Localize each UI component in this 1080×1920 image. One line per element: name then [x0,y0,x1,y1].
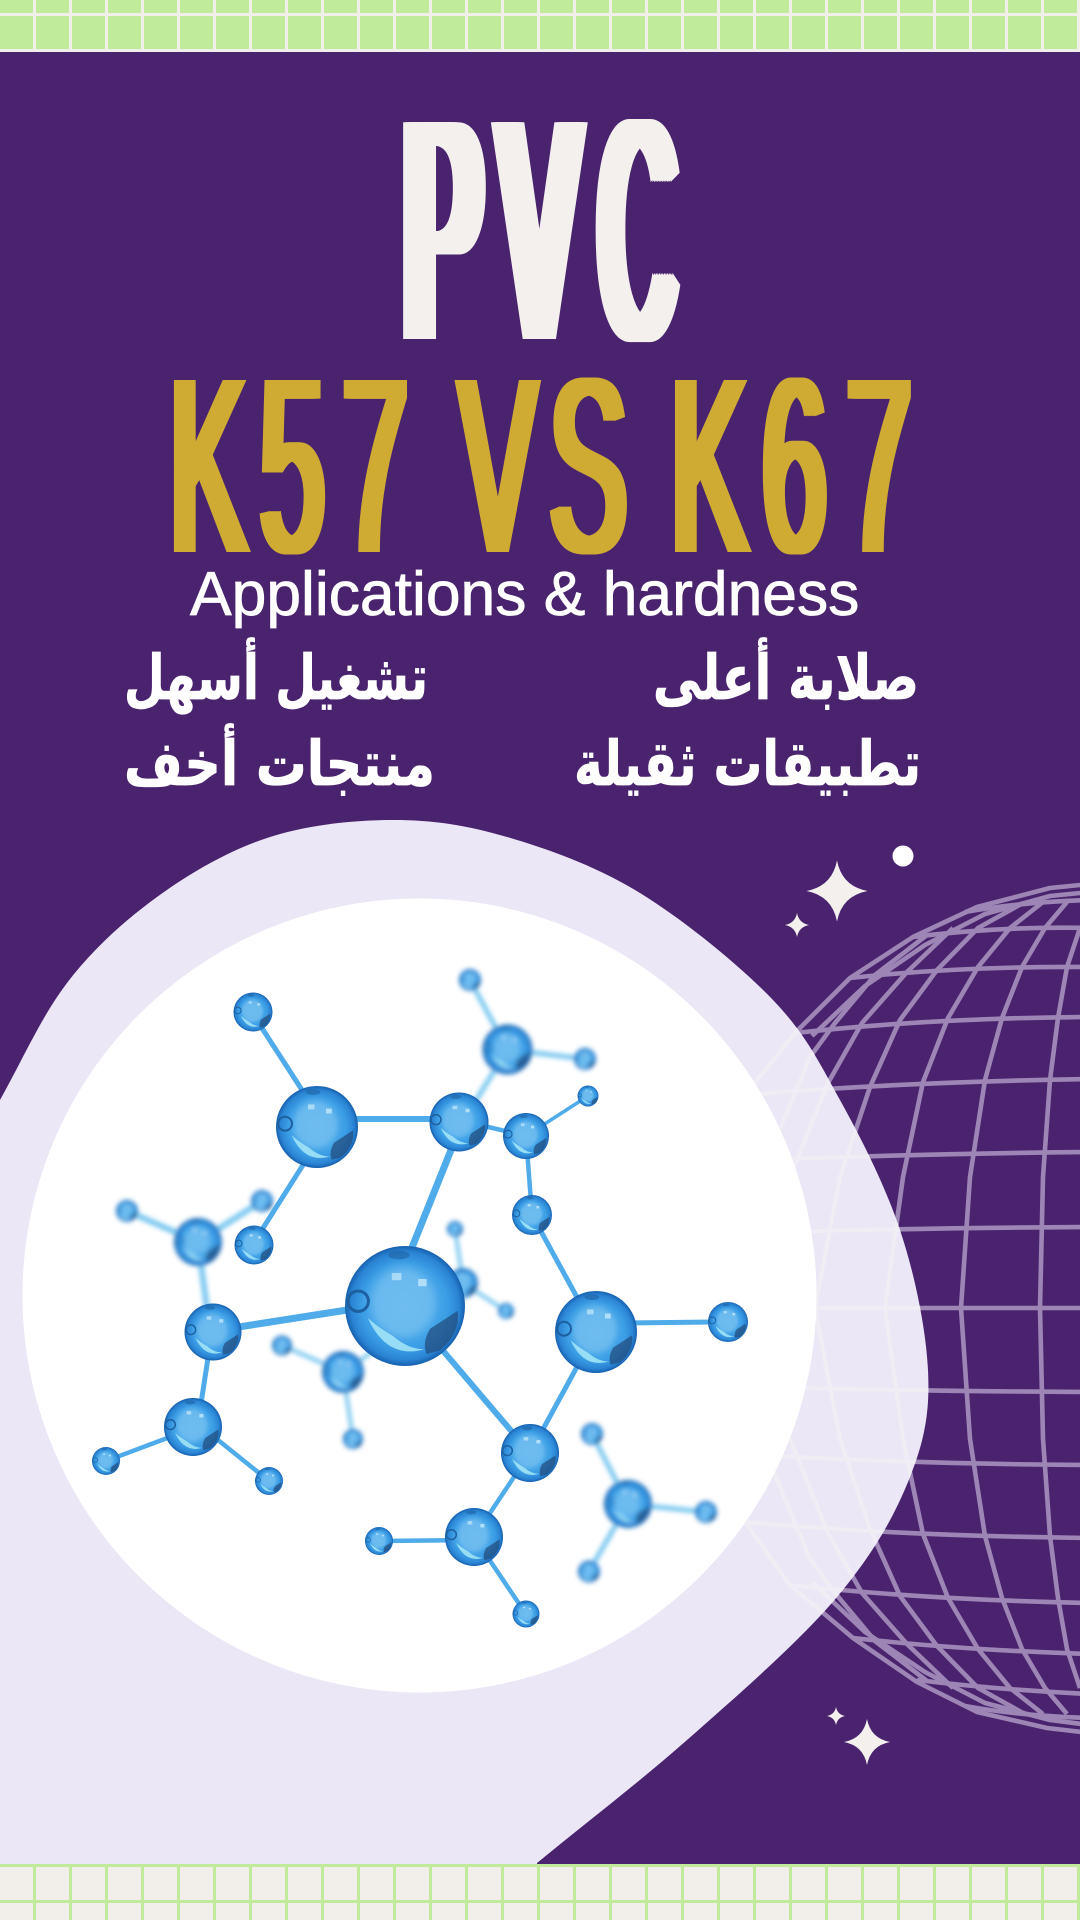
molecule diagram [92,969,748,1628]
arabic text: left column, line 2: منتجات أخف [124,723,435,800]
globe lines seen through blob [797,1028,928,1614]
wireframe globe [796,882,1080,1734]
atoms [92,992,748,1628]
title: PVC: C [601,54,674,406]
top grid band [0,0,1080,52]
title: PVC: PV [405,54,601,406]
subtitle: applications and hardness: Applications & hardness [190,560,859,629]
title: K57 VS K67: K57 VS K67 [170,326,911,605]
arabic text: right column, line 1: صلابة أعلى [653,637,919,714]
sparkles: lower group [827,1707,890,1765]
out-of-focus molecules [116,969,717,1582]
bottom grid band [0,1864,1080,1920]
arabic text: left column, line 1: تشغيل أسهل [124,637,428,714]
arabic text: right column, line 2: تطبيقات ثقيلة [574,727,921,800]
illustration: sphere, blob, molecule and sparkles [0,820,1080,1864]
white circle [22,898,816,1692]
bonds [106,1022,715,1614]
sparkles: upper group [785,846,914,937]
lavender blob [0,820,928,1864]
